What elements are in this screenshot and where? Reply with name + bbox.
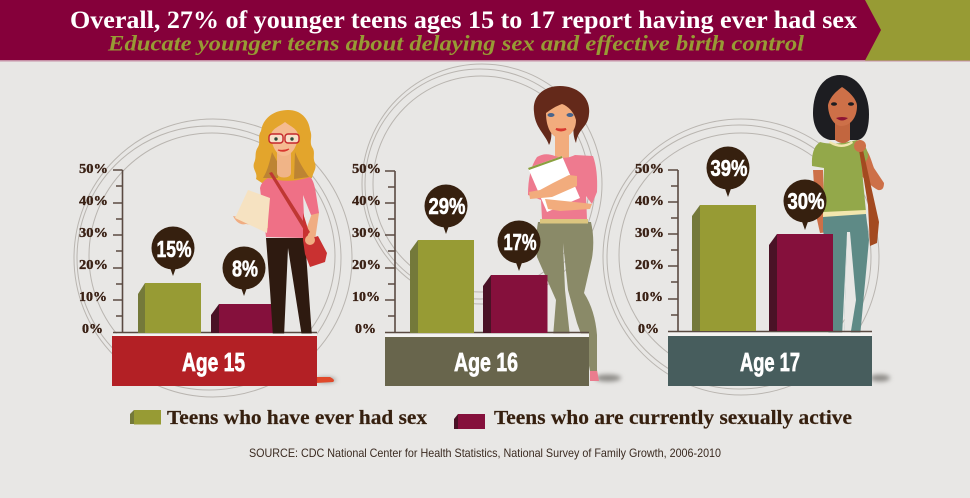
banner arrow — [865, 0, 970, 60]
axis age 15 — [79, 162, 317, 337]
subtitle: Educate younger teens about delaying sex and effective birth control — [107, 30, 805, 56]
axis age 15: 0% — [82, 322, 103, 337]
age 17 plinth: Age 17 — [740, 347, 800, 377]
axis age 15: 10% — [79, 290, 107, 305]
bar: ever had sex 15% — [138, 283, 201, 333]
callout: 17% — [498, 220, 540, 271]
axis age 15: 20% — [79, 258, 108, 273]
decorative circles age 15 — [74, 119, 352, 397]
callout: 30% — [784, 180, 826, 230]
axis age 17: 20% — [635, 258, 664, 273]
axis age 16: 50% — [352, 162, 381, 177]
axis age 16: 10% — [352, 290, 380, 305]
axis age 15: 40% — [79, 194, 108, 209]
figure: blonde teen — [233, 110, 336, 383]
axis age 17: 30% — [635, 226, 664, 241]
source note: SOURCE: CDC National Center for Health Statistics, National Survey of Family Growth, 2006-2010 — [249, 446, 721, 460]
legend — [130, 407, 852, 429]
legend label: currently active: Teens who are currently sexually active — [494, 407, 852, 429]
title: Overall, 27% of younger teens ages 15 to 17 report having ever had sex — [70, 7, 858, 34]
axis age 16: 40% — [352, 194, 381, 209]
axis age 15: 30% — [79, 226, 108, 241]
callout: 29% — [424, 184, 468, 234]
panel: age 17 — [603, 75, 890, 395]
bar: ever had sex 29% — [410, 240, 474, 333]
callout: 15% — [152, 226, 194, 276]
axis age 16: 30% — [352, 226, 381, 241]
axis age 17: 0% — [638, 322, 659, 337]
axis age 17 — [635, 162, 872, 337]
callout: 8%: 8% — [232, 256, 258, 282]
callout: 8% — [222, 246, 266, 296]
axis age 17: 50% — [635, 162, 664, 177]
axis age 17: 40% — [635, 194, 664, 209]
legend swatch: currently active — [454, 414, 485, 429]
bar: ever had sex 39% — [692, 205, 756, 331]
panel: age 16 — [352, 64, 621, 386]
callout: 29%: 29% — [428, 193, 466, 219]
axis age 16: 0% — [355, 322, 376, 337]
callout: 15%: 15% — [156, 236, 192, 262]
age 16 plinth: Age 16 — [454, 347, 518, 377]
callout: 39%: 39% — [710, 155, 748, 181]
axis age 15: 50% — [79, 162, 108, 177]
axis age 17: 10% — [635, 290, 663, 305]
decorative circles age 16 — [362, 64, 602, 304]
legend swatch: ever had sex — [130, 410, 161, 424]
age 17 plinth — [668, 332, 872, 386]
age 16 plinth — [385, 334, 589, 386]
bar: currently active 30% — [769, 234, 833, 331]
axis age 16 — [352, 162, 589, 337]
legend label: ever had sex: Teens who have ever had sex — [167, 407, 427, 429]
axis age 16: 20% — [352, 258, 381, 273]
callout: 30%: 30% — [788, 188, 824, 214]
age 15 plinth — [112, 334, 317, 386]
bar: currently active 17% — [483, 275, 548, 333]
callout: 17%: 17% — [504, 229, 536, 255]
age 15 plinth: Age 15 — [182, 347, 245, 377]
header banner — [0, 0, 970, 62]
figure: brunette teen — [528, 86, 621, 382]
panel: age 15 — [74, 110, 352, 397]
figure: dark-haired teen — [812, 75, 890, 382]
decorative circles age 17 — [603, 119, 879, 395]
bar: currently active 8% — [211, 304, 276, 333]
callout: 39% — [706, 146, 750, 197]
